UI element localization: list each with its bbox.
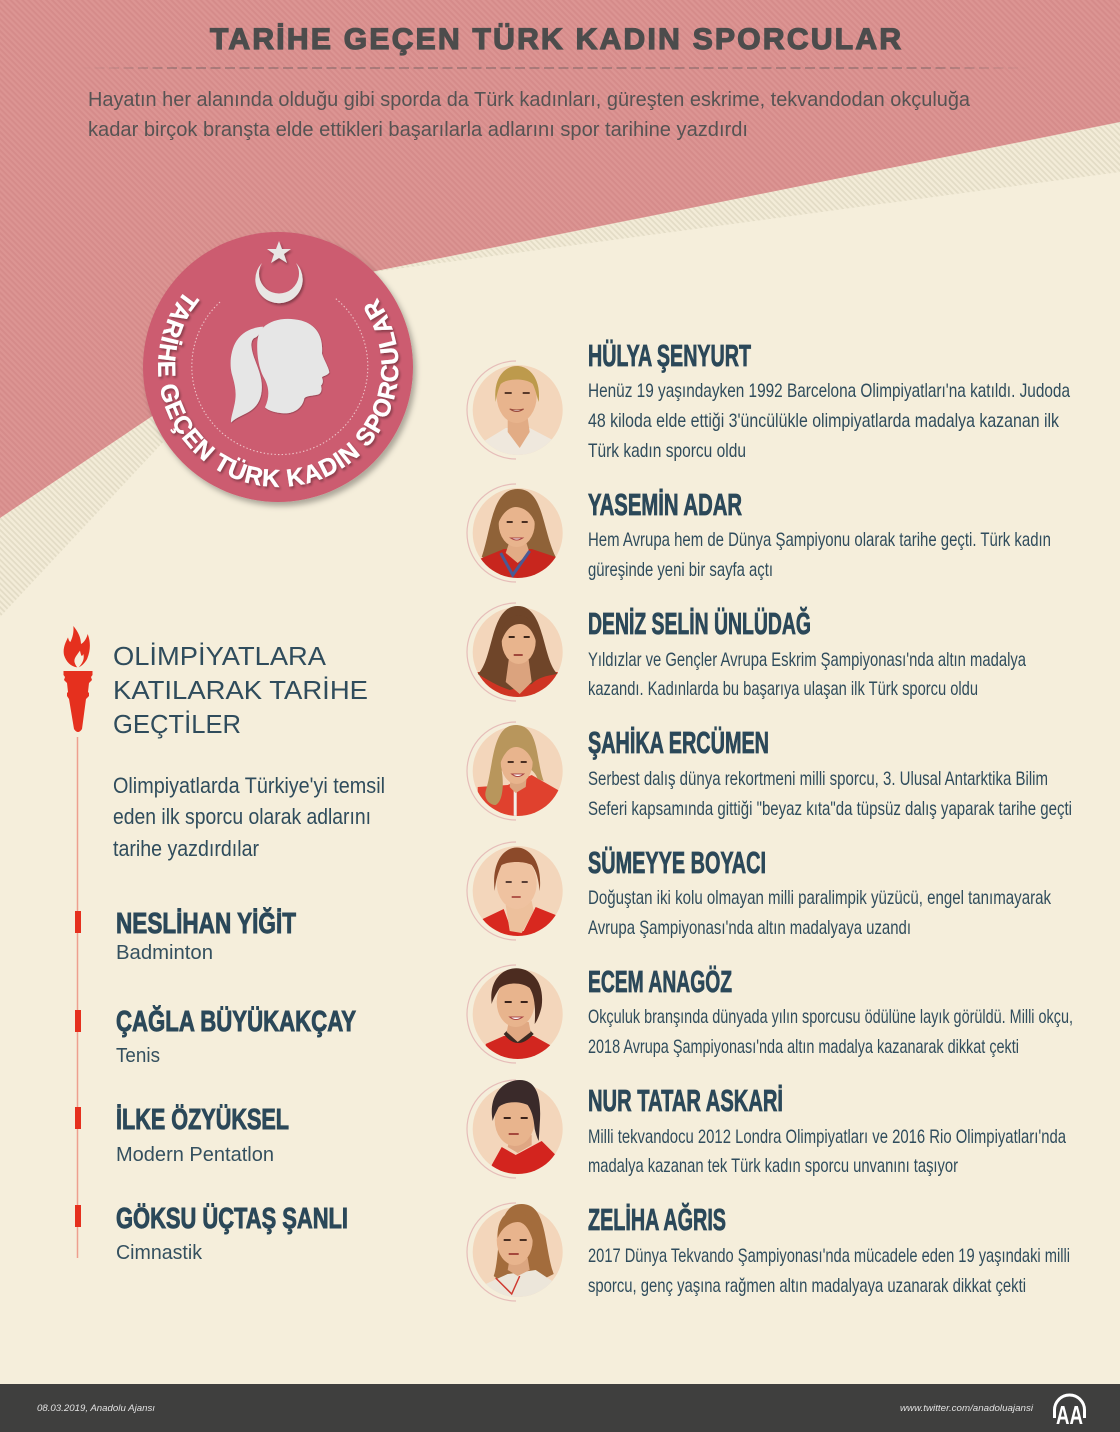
footer: [0, 1384, 1120, 1432]
left heading: KATILARAK TARİHE: [113, 675, 368, 705]
portrait: Sümeyye Boyacı: [467, 842, 563, 941]
athlete: Neslihan Yiğit: Badminton: [116, 942, 213, 964]
text: Nur Tatar Askari: madalya kazanan tek Türk kadın sporcu unvanını taşıyor: [588, 1155, 958, 1177]
athlete: İlke Özyüksel: [75, 1103, 289, 1166]
portrait: Yasemin Adar: [467, 484, 563, 583]
left description: Olimpiyatlarda Türkiye'yi temsil: [113, 773, 385, 798]
text: Ecem Anagöz: [588, 964, 1073, 1058]
portrait: Zeliha Ağrıs: [467, 1203, 563, 1302]
left heading: OLİMPİYATLARA: [113, 641, 327, 671]
footer: 08.03.2019, Anadolu Ajansı: [37, 1403, 155, 1414]
intro text: [88, 89, 971, 141]
badge: [143, 232, 420, 510]
badge circular text: TARİHE GEÇEN TÜRK KADIN SPORCULAR: [158, 294, 402, 490]
icon: AA logo: AA: [1056, 1400, 1083, 1430]
portrait: Şahika Ercümen: [467, 722, 563, 821]
intro text: Hayatın her alanında olduğu gibi sporda da Türk kadınları, güreşten eskrime, tekvandodan okçuluğa: [88, 89, 971, 111]
text: Hülya Şenyurt: [588, 338, 1070, 462]
athlete: Çağla Büyükakçay: ÇAĞLA BÜYÜKAKÇAY: [116, 1004, 356, 1038]
athlete: Neslihan Yiğit: NESLİHAN YİĞİT: [116, 906, 296, 940]
icon: star and crescent: [255, 241, 303, 303]
athlete: Çağla Büyükakçay: [75, 1004, 356, 1067]
portrait: Hülya Şenyurt: [467, 361, 563, 460]
portrait: Deniz Selin Ünlüdağ: [467, 603, 563, 702]
text: Şahika Ercümen: ŞAHİKA ERCÜMEN: [588, 725, 769, 760]
text: Hülya Şenyurt: HÜLYA ŞENYURT: [588, 338, 751, 373]
text: Zeliha Ağrıs: ZELİHA AĞRIS: [588, 1202, 726, 1237]
torch icon: [64, 626, 92, 732]
athlete: İlke Özyüksel: İLKE ÖZYÜKSEL: [116, 1103, 289, 1136]
text: Deniz Selin Ünlüdağ: kazandı. Kadınlarda bu başarıya ulaşan ilk Türk sporcu oldu: [588, 678, 978, 700]
athlete: Göksu Üçtaş Şanlı: GÖKSU ÜÇTAŞ ŞANLI: [116, 1202, 348, 1235]
text: Sümeyye Boyacı: Avrupa Şampiyonası'nda altın madalyaya uzandı: [588, 917, 911, 939]
hatched band: left: [0, 407, 166, 617]
text: Yasemin Adar: güreşinde yeni bir sayfa açtı: [588, 559, 773, 581]
athlete: İlke Özyüksel: Modern Pentatlon: [116, 1144, 274, 1166]
text: Yasemin Adar: YASEMİN ADAR: [588, 487, 742, 522]
athlete: Göksu Üçtaş Şanlı: [75, 1202, 348, 1264]
athlete: Çağla Büyükakçay: Tenis: [116, 1045, 160, 1067]
portrait: Ecem Anagöz: [467, 965, 563, 1064]
icon: woman head silhouette: [231, 319, 329, 423]
athlete: Neslihan Yiğit: [75, 906, 296, 964]
left description: tarihe yazdırdılar: [113, 836, 259, 861]
title: TARİHE GEÇEN TÜRK KADIN SPORCULAR: [210, 23, 901, 56]
text: Deniz Selin Ünlüdağ: [588, 606, 1026, 700]
footer: www.twitter.com/anadoluajansi: [900, 1403, 1034, 1414]
text: Nur Tatar Askari: [588, 1083, 1066, 1177]
athlete: Göksu Üçtaş Şanlı: Cimnastik: [116, 1242, 203, 1264]
text: Şahika Ercümen: [588, 725, 1072, 820]
left heading: GEÇTİLER: [113, 709, 241, 739]
left heading: [113, 641, 368, 739]
text: Zeliha Ağrıs: [588, 1202, 1070, 1297]
left description: eden ilk sporcu olarak adlarını: [113, 804, 371, 829]
text: Nur Tatar Askari: NUR TATAR ASKARİ: [588, 1083, 783, 1118]
text: Yasemin Adar: [588, 487, 1051, 581]
text: Deniz Selin Ünlüdağ: DENİZ SELİN ÜNLÜDAĞ: [588, 606, 811, 641]
timeline line: [76, 737, 78, 1258]
hatched band: right: [366, 122, 1120, 273]
portrait: Nur Tatar Askari: [467, 1080, 563, 1179]
text: Hülya Şenyurt: Türk kadın sporcu oldu: [588, 440, 746, 462]
text: Sümeyye Boyacı: [588, 845, 1051, 939]
icon: AA logo: [1054, 1395, 1084, 1430]
text: Sümeyye Boyacı: SÜMEYYE BOYACI: [588, 845, 766, 880]
pink header background: [0, 0, 1120, 518]
left description: [113, 773, 385, 861]
text: Ecem Anagöz: ECEM ANAGÖZ: [588, 964, 732, 999]
intro text: kadar birçok branşta elde ettikleri başarılarla adlarını spor tarihine yazdırdı: [88, 119, 748, 141]
